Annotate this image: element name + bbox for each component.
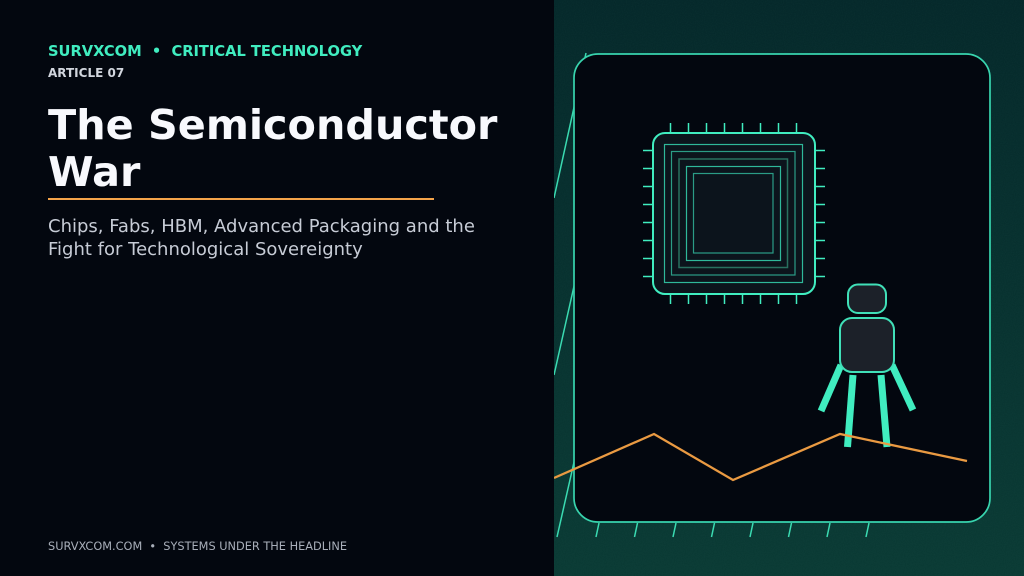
accent rule [48, 198, 434, 200]
subtitle [48, 216, 475, 260]
chip pins [643, 123, 825, 304]
title: War [48, 148, 140, 196]
background [554, 0, 1024, 576]
kicker: SURVXCOM • CRITICAL TECHNOLOGY [48, 43, 362, 60]
panel: illustration [554, 0, 1024, 576]
article number: ARTICLE 07 [48, 66, 124, 80]
chip body [653, 133, 815, 294]
icon: figure [821, 284, 913, 447]
figure head [848, 284, 886, 313]
dark framed card [574, 54, 990, 522]
title [48, 101, 498, 196]
footer: SURVXCOM.COM • SYSTEMS UNDER THE HEADLINE [48, 539, 347, 553]
title: The Semiconductor [48, 101, 497, 149]
figure torso [840, 318, 894, 372]
background diagonal lines [554, 53, 869, 537]
panel: left text column [0, 0, 554, 576]
chip concentric layers [664, 144, 802, 282]
subtitle: Chips, Fabs, HBM, Advanced Packaging and the [48, 216, 475, 237]
icon: chip [643, 123, 825, 304]
subtitle: Fight for Technological Sovereignty [48, 239, 363, 260]
figure legs and arms [821, 365, 913, 447]
orange signal line [554, 434, 967, 480]
